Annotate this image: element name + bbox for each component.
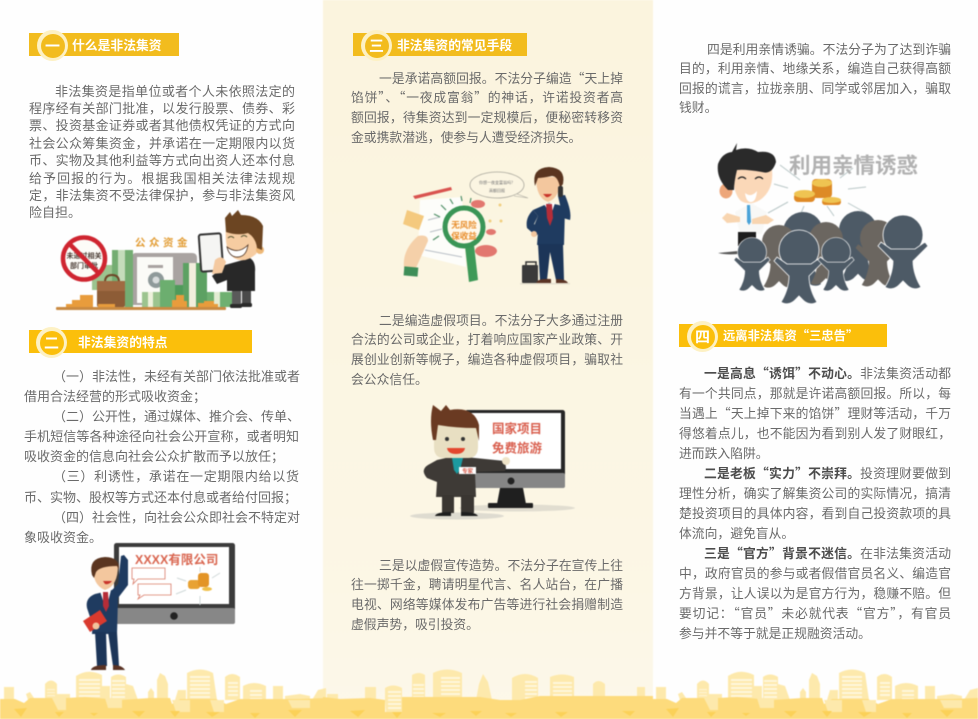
heading: section three	[353, 33, 527, 56]
text block: method four: 钱财。	[679, 97, 717, 116]
text block: three warnings: 得悠着点儿，也不能因为看到别人发了财眼红，	[679, 423, 951, 442]
rays	[768, 165, 866, 218]
illustration: company monitor and man	[83, 543, 235, 670]
text block: three warnings: 方背景，让人误以为是官方行为，稳赚不赔。但	[679, 583, 951, 602]
money stacks	[92, 250, 232, 307]
green rays	[433, 196, 471, 240]
screen text: 免费旅游	[492, 438, 542, 456]
text block: three warnings: 有一个共同点，那就是许诺高额回报。所以，每	[679, 383, 951, 402]
text block: three warnings: 理性分析，确实了解集资公司的实际情况，搞清	[679, 483, 951, 502]
caller	[527, 167, 570, 283]
text block: three warnings: 三是“官方”背景不迷信。在非法集资活动	[704, 543, 951, 562]
text block: method four	[679, 38, 951, 116]
text block: method one	[351, 68, 623, 146]
monitor	[114, 543, 235, 624]
briefcase	[97, 275, 125, 307]
ground bar	[56, 307, 226, 310]
text block: method one: 额回报，待集资达到一定规模后，便秘密转移资	[351, 107, 623, 126]
text block: method one: 金或携款潜逃，使参与人遭受经济损失。	[351, 127, 581, 146]
text block: three warnings: 楚投资项目的具体内容，看到自己投资款项的具	[679, 503, 951, 522]
expert: 专家	[462, 467, 473, 475]
sticky note	[403, 210, 424, 230]
skyline: right	[652, 670, 978, 719]
heading: section four: 远离非法集资“三忠告”	[723, 326, 858, 344]
man with tablet	[199, 210, 264, 308]
text block: definition: 程序经有关部门批准，以发行股票、债券、彩	[29, 98, 295, 117]
expert	[424, 405, 510, 516]
text block: three warnings	[679, 363, 951, 642]
text block: method two: 二是编造虚假项目。不法分子大多通过注册	[379, 310, 623, 328]
heading: section two	[29, 330, 252, 353]
boy	[718, 143, 776, 254]
text block: three warnings: 中，政府官员的参与或者假借官员名义、编造官	[679, 563, 951, 582]
text block: characteristics: 币、实物、股权等方式还本付息或者给付回报；	[24, 487, 297, 506]
caption: 利用亲情诱惑	[789, 149, 918, 180]
coins on screen	[176, 567, 220, 605]
text block: method four: 回报的谎言，拉拢亲朋、同学或邻居加入，骗取	[679, 78, 951, 96]
shadow	[520, 283, 570, 284]
text block: three warnings: 一是高息“诱饵”不动心。非法集资活动都	[704, 363, 951, 382]
text block: definition: 社会公众筹集资金，并承诺在一定期限内以货	[29, 133, 295, 152]
text block: definition: 定，非法集资不受法律保护，参与非法集资风	[29, 185, 295, 204]
text block: definition: 给予回报的行为。根据我国相关法律法规规	[29, 168, 295, 187]
heading: section one: 一	[45, 34, 60, 56]
heading: section three: 非法集资的常见手段	[397, 35, 512, 54]
text block: method three: 往一掷千金，聘请明星代言、名人站台，在广播	[351, 574, 623, 593]
text block: method two: 合法的公司或企业，打着响应国家产业政策、开	[351, 329, 623, 348]
illustration: magnifier and phone caller	[403, 167, 570, 284]
heading: section two: 非法集资的特点	[78, 332, 168, 351]
heading: section four	[679, 324, 887, 347]
text block: characteristics: 象吸收资金。	[24, 527, 102, 546]
illustration: lure of family ties	[718, 143, 928, 304]
screen title: XXXX有限公司	[135, 552, 218, 567]
skyline: left	[0, 670, 326, 719]
heading: section four: 四	[695, 326, 710, 346]
no-entry sign: 部门审批	[70, 261, 98, 271]
text block: method four: 目的，利用亲情、地缘关系，编造自己获得高额	[679, 58, 951, 77]
text block: three warnings: 二是老板“实力”不崇拜。投资理财要做到	[704, 463, 951, 482]
text block: three warnings: 参与并不等于就是正规融资活动。	[679, 623, 871, 642]
heading: section three: 三	[369, 34, 384, 56]
text block: definition: 币、实物及其他利益等方式向出资人还本付息	[29, 150, 295, 169]
heading: section one	[29, 33, 179, 56]
presenter	[83, 555, 128, 670]
text block: definition	[29, 80, 295, 221]
text block: characteristics: （二）公开性，通过媒体、推介会、传单、	[53, 406, 300, 425]
text block: method three: 三是以虚假宣传造势。不法分子在宣传上往	[379, 554, 623, 574]
text block: method three: 虚假声势，吸引投资。	[351, 614, 479, 633]
no-entry sign	[63, 238, 105, 280]
magnifier: 保收益	[451, 230, 477, 242]
speech bubble	[470, 172, 528, 198]
magnifier: 无风险	[451, 219, 477, 231]
safe	[133, 253, 197, 305]
text block: method three: 电视、网络等媒体发布广告等进行社会捐赠制造	[351, 594, 623, 613]
pen	[413, 187, 452, 199]
text block: method two: 会公众信任。	[351, 369, 428, 388]
clouds	[471, 200, 497, 257]
text block: three warnings: 体流向，避免盲从。	[679, 523, 794, 542]
text block: three warnings: 要切记：“官员”未必就代表“官方”，有官员	[679, 603, 951, 622]
label: public funds: 公众资金	[135, 235, 191, 250]
screen text: 国家项目	[492, 418, 542, 437]
text block: characteristics	[24, 366, 300, 546]
coins	[794, 179, 841, 205]
monitor	[465, 410, 565, 508]
text block: characteristics: （三）利诱性，承诺在一定期限内给以货	[53, 466, 299, 485]
text block: method three	[351, 554, 623, 633]
text block: characteristics: 借用合法经营的形式吸收资金；	[24, 386, 206, 405]
panel: centre cream column	[323, 0, 653, 719]
crowd back row	[778, 211, 882, 286]
coins	[66, 295, 218, 307]
briefcase	[522, 262, 538, 283]
skyline: centre	[323, 670, 653, 719]
text block: method two: 展创业创新等幌子，编造各种虚假项目，骗取社	[351, 349, 623, 368]
heading: section two: 二	[44, 332, 59, 352]
speech bubble: 你想一夜变富翁吗？	[479, 179, 515, 186]
text block: three warnings: 当遇上“天上掉下来的馅饼”理财等活动，千万	[679, 403, 951, 422]
text block: characteristics: 手机短信等各种途径向社会公开宣称，或者明知	[24, 426, 299, 445]
text block: characteristics: （一）非法性，未经有关部门依法批准或者	[53, 366, 300, 385]
screen text	[492, 418, 542, 456]
text block: method one: 一是承诺高额回报。不法分子编造“天上掉	[379, 68, 623, 86]
text block: method one: 馅饼”、“一夜成富翁”的神话，许诺投资者高	[351, 87, 623, 106]
no-entry sign: 未通过相关	[66, 251, 102, 261]
text block: method four: 四是利用亲情诱骗。不法分子为了达到诈骗	[707, 38, 951, 58]
hand	[404, 236, 428, 268]
text block: method two	[351, 310, 623, 388]
speech bubble: 高额回报	[489, 187, 505, 194]
text block: definition: 非法集资是指单位或者个人未依照法定的	[55, 80, 295, 100]
text block: three warnings: 进而跌入陷阱。	[679, 443, 769, 462]
text block: definition: 险自担。	[29, 202, 81, 221]
shadows	[459, 504, 575, 512]
speech bubbles	[132, 568, 171, 599]
magnifier	[445, 208, 483, 282]
illustration: expert with national project monitor	[410, 405, 575, 520]
text block: definition: 票、投资基金证券或者其他债权凭证的方式向	[29, 115, 295, 134]
crowd front row	[734, 215, 928, 304]
heading: section one: 什么是非法集资	[72, 35, 162, 54]
text block: characteristics: （四）社会性，向社会公众即社会不特定对	[53, 507, 300, 526]
document	[418, 197, 466, 267]
text block: characteristics: 吸收资金的信息向社会公众扩散而予以放任；	[24, 446, 284, 465]
illustration: public funds	[56, 210, 264, 310]
